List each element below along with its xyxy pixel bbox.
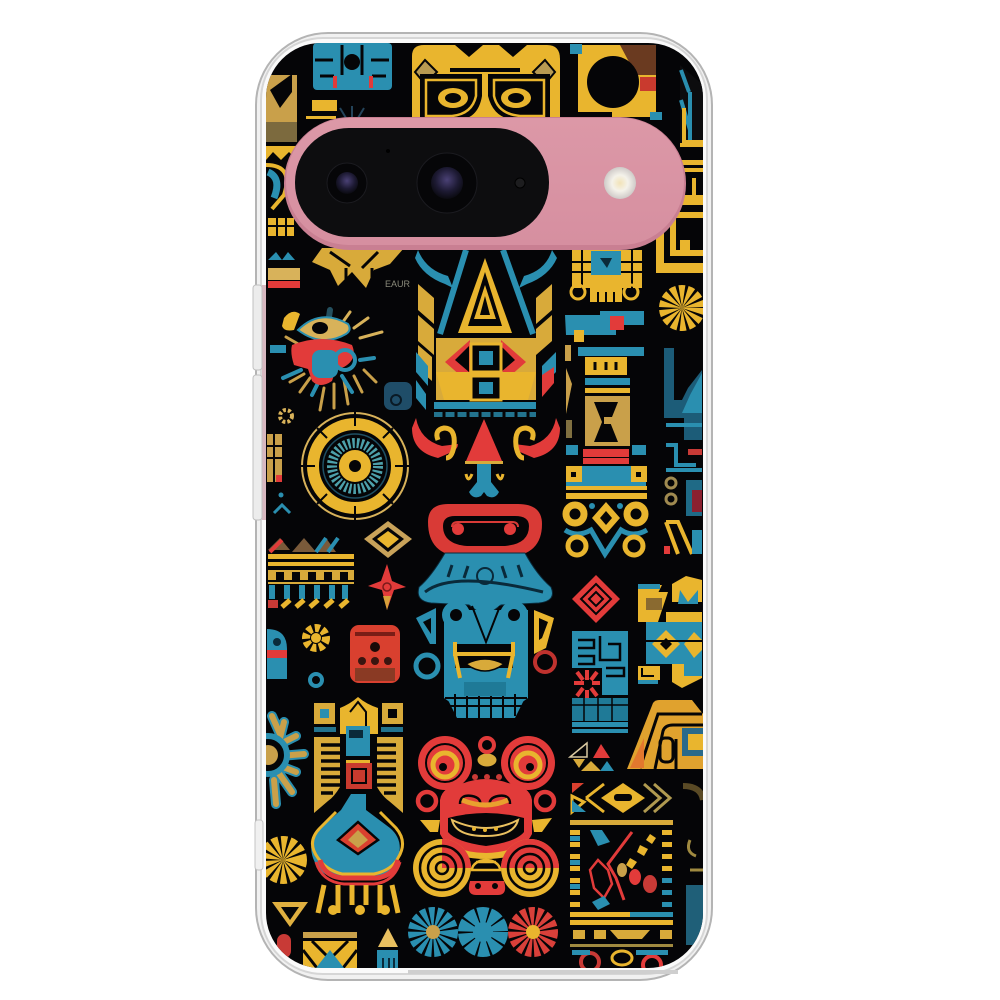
motif: teal glyph block	[572, 631, 628, 733]
motif: right yellow teal block	[638, 576, 702, 688]
mic dot	[386, 149, 390, 153]
motif: red creature	[413, 736, 559, 897]
motif: top right yellow block with black circle	[570, 44, 662, 120]
motif: yellow sunburst below camera left	[312, 248, 411, 289]
sensor	[515, 178, 525, 188]
flash	[604, 167, 636, 199]
camera window	[295, 128, 549, 237]
motif: teal mask face	[416, 553, 555, 718]
motif: small yellow teal emblem	[571, 250, 642, 302]
motif: yellow sunburst below camera left: EAUR	[385, 279, 411, 289]
phone case product illustration	[252, 32, 713, 981]
motif: yellow diamond	[364, 521, 412, 558]
motif: right tall column	[565, 310, 647, 555]
motif: small triangles	[570, 743, 614, 771]
motif: red lips	[428, 504, 542, 557]
main lens	[417, 153, 477, 213]
motif: concentric yellow wheel	[301, 412, 409, 520]
clear case shell	[253, 33, 712, 980]
motif: central totem headdress	[415, 250, 557, 417]
motif: small teal ring	[310, 674, 322, 686]
motif: right edge dark glyphs	[686, 840, 703, 945]
motif: left edge small totem	[267, 434, 290, 513]
motif: red four point star	[368, 564, 406, 610]
motif: eye sun	[270, 310, 412, 410]
motif: right edge teal column	[664, 348, 702, 554]
motif: top teal mask	[306, 43, 392, 119]
patterned artwork	[249, 43, 703, 974]
motif: yellow figure with bottle	[311, 697, 403, 915]
camera bar	[284, 117, 686, 250]
motif: yellow down triangle	[272, 902, 308, 927]
motif: bottom right strip	[572, 950, 668, 968]
motif: chevron band	[572, 783, 703, 813]
motif: yellow sun lower left	[271, 848, 295, 872]
small lens	[327, 163, 367, 203]
motif: bottom left red shape and tile	[277, 932, 357, 968]
motif: right yellow concentric square	[656, 160, 703, 273]
motif: red horns and nose	[412, 418, 560, 497]
motif: lower right yellow pyramid	[627, 700, 703, 769]
motif: yellow small flower	[306, 628, 326, 648]
motif: top yellow mask	[412, 45, 560, 120]
motif: stripe block	[268, 538, 354, 608]
motif: small teal tower	[377, 928, 398, 968]
motif: framed dotted panel	[570, 820, 673, 947]
motif: red spiral diamond	[572, 575, 620, 623]
motif: left edge teal blob	[267, 629, 287, 679]
motif: yellow sun top right	[670, 296, 694, 320]
motif: three rosettes	[420, 917, 546, 947]
motif: right upper edge stripes	[680, 65, 703, 145]
motif: left upper edge stack	[266, 74, 300, 288]
motif: left teal yellow flower	[266, 711, 309, 809]
motif: red block with dots	[350, 625, 400, 683]
motif: tiny dots flower	[280, 410, 292, 422]
